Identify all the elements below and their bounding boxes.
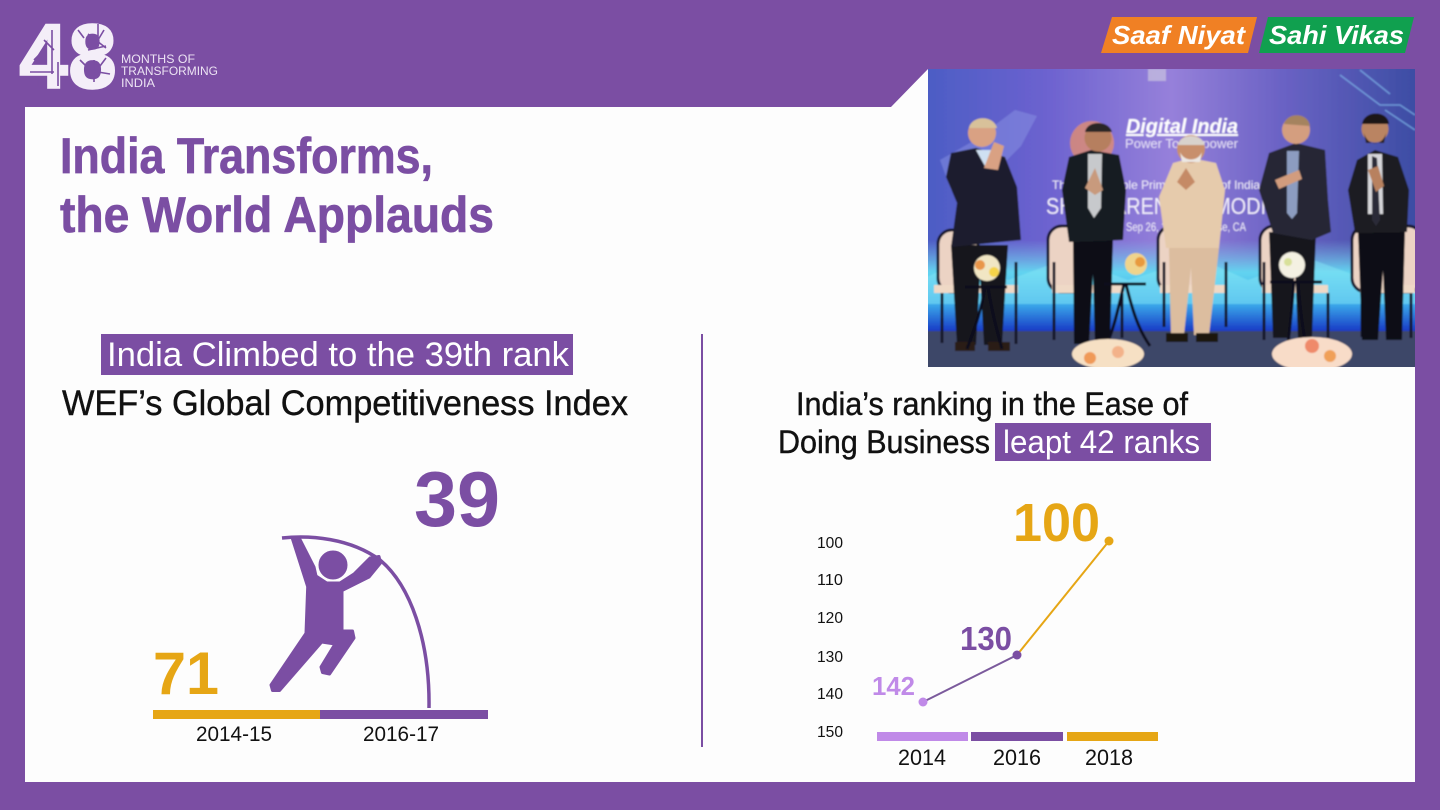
value: 39: 39 (414, 455, 500, 543)
icon: vaulter (271, 538, 380, 690)
line segment 2014-2016 (923, 655, 1017, 702)
logo: 48 months of transforming India: MONTHS OF (121, 52, 195, 66)
photo text: date: Sep 26, 2015, San Jose, CA (1126, 220, 1246, 234)
photo text: Digital India: Digital India (1126, 116, 1238, 138)
man 2 (1062, 123, 1126, 344)
heading (60, 128, 494, 243)
badge: Saaf Niyat: Saaf Niyat (1112, 20, 1246, 50)
pole (282, 537, 429, 708)
right heading: Doing Business (778, 424, 990, 460)
y axis labels: 140 (817, 686, 843, 703)
bar 2018 (1067, 732, 1158, 741)
photo text: Shri Narendra Modi: SHRI NARENDRA MODI (1046, 193, 1266, 219)
y axis labels: 130 (817, 649, 843, 666)
y axis labels: 120 (817, 610, 843, 627)
logo: 48 months of transforming India: INDIA (121, 76, 155, 90)
baseline bar: 2014-15 (153, 710, 320, 719)
highlight: leapt 42 ranks: leapt 42 ranks (1003, 424, 1200, 460)
label: 2016-17: 2016-17 (363, 723, 439, 746)
man 1 (946, 118, 1021, 351)
point 2014 (918, 698, 928, 706)
pole vault chart (153, 455, 500, 746)
y axis labels: 100 (817, 535, 843, 552)
point 2016 (1012, 650, 1022, 660)
line segment 2016-2018 (1017, 541, 1109, 655)
value: 142: 142 (872, 671, 915, 701)
label: 2014: 2014 (898, 745, 946, 770)
label: 2016: 2016 (993, 745, 1041, 770)
point 2018 (1104, 536, 1114, 546)
photo text: Power To Empower: Power To Empower (1125, 136, 1239, 151)
left heading: India Climbed to the 39th rank: India Climbed to the 39th rank (107, 336, 570, 374)
man 5 (1348, 114, 1409, 340)
badge: Saaf Niyat (1101, 17, 1257, 53)
logo: 48 months of transforming India: TRANSFORMING (121, 64, 218, 78)
man 3: central figure in beige (1159, 135, 1225, 342)
badge: Sahi Vikas (1259, 17, 1414, 53)
value: 100: 100 (1013, 493, 1100, 553)
divider (701, 334, 703, 747)
bar 2014 (877, 732, 968, 741)
chairs (938, 226, 1422, 292)
label: 2018: 2018 (1085, 745, 1133, 770)
tables (965, 282, 1322, 349)
heading: India Transforms, (60, 128, 433, 184)
value: 130: 130 (960, 620, 1012, 657)
right heading (778, 386, 1211, 461)
y axis labels (817, 535, 843, 741)
y axis labels: 150 (817, 724, 843, 741)
badge: Sahi Vikas: Sahi Vikas (1269, 20, 1404, 50)
photo text: event line: The Honourable Prime Minister of India (1052, 178, 1260, 192)
line chart: ease of doing business rank (817, 493, 1158, 770)
heading: the World Applauds (60, 187, 494, 243)
bar 2016 (971, 732, 1063, 741)
right heading: India’s ranking in the Ease of (796, 386, 1188, 422)
logo: 48 months of transforming India: 48 (19, 6, 117, 108)
label: 2014-15: 2014-15 (196, 723, 272, 746)
photo: leaders applauding at Digital India event (920, 60, 1423, 375)
man 4 (1259, 115, 1331, 338)
baseline bar: 2016-17 (320, 710, 488, 719)
left subheading: WEF’s Global Competitiveness Index (62, 384, 628, 423)
logo: 48 months of transforming India (19, 6, 218, 108)
value: 71: 71 (153, 640, 219, 707)
flowers (974, 252, 1352, 371)
y axis labels: 110 (817, 572, 843, 589)
